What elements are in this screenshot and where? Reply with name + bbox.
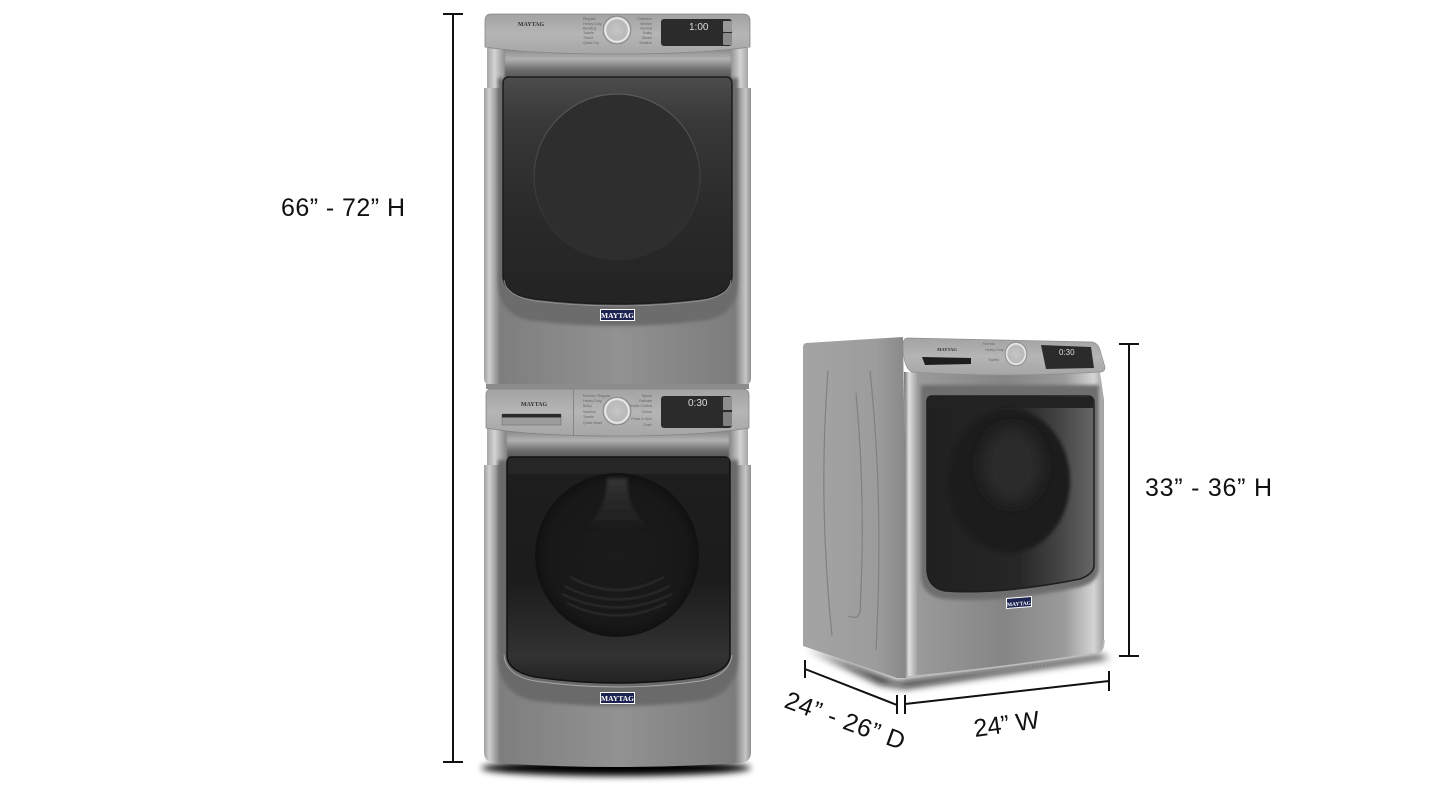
time readout: 0:30 [688, 398, 708, 409]
washer [484, 389, 751, 767]
dryer control panel [485, 14, 750, 54]
dimension: width [905, 671, 1109, 743]
drum outline [534, 94, 700, 260]
washer control panel [486, 389, 749, 436]
washer badge [1006, 596, 1032, 609]
cycle labels right: Delicate [639, 399, 652, 403]
washer recess band [507, 432, 729, 460]
bracket [443, 14, 463, 762]
cycle labels left: Towels [583, 415, 594, 419]
bracket [905, 671, 1109, 714]
door surround [921, 385, 1099, 600]
dryer recess band [505, 50, 731, 80]
door glass [927, 396, 1094, 592]
door top band [508, 458, 729, 474]
dimension: stacked height [281, 14, 463, 762]
seam between units [486, 384, 749, 389]
badge field [1007, 597, 1031, 608]
cycle labels right: Drain [643, 423, 652, 427]
label: 33” - 36” H [1145, 474, 1272, 502]
badge field [601, 310, 634, 320]
display [661, 19, 732, 46]
badge text: MAYTAG [1007, 601, 1032, 608]
label: 24” W [972, 706, 1042, 743]
floor shadow [481, 760, 751, 776]
panel divider [572, 389, 574, 436]
cycle labels left: Regular [583, 17, 596, 21]
badge text: MAYTAG [601, 311, 634, 320]
second button [723, 412, 732, 426]
cycle labels [983, 342, 1004, 362]
cycle labels left: Bulky [583, 404, 592, 408]
cycle labels left: Heavy Duty [583, 399, 602, 403]
label: 24” - 26” D [781, 686, 909, 756]
drum ribs [562, 577, 672, 616]
cycle labels: Towels [988, 358, 999, 362]
knob [1005, 342, 1027, 366]
badge plate [600, 309, 635, 321]
stacked dryer on washer [481, 14, 751, 776]
drum texture [982, 427, 1042, 503]
cycle labels right: Delicates [637, 17, 652, 21]
washer door [504, 457, 732, 687]
washer badge [600, 692, 635, 704]
drum [535, 473, 699, 637]
dryer [484, 14, 751, 385]
cycle labels: Heavy Duty [985, 348, 1004, 352]
cycle labels right: Sanitize [639, 41, 652, 45]
cycle labels left: Quick Wash [583, 421, 602, 425]
washer shadow [806, 648, 1110, 688]
badge plate [600, 692, 635, 704]
panel plate [903, 338, 1105, 375]
second button [723, 33, 732, 45]
bracket [1119, 344, 1139, 656]
badge plate [1006, 596, 1032, 609]
cycle labels right: Steam [642, 36, 652, 40]
display [1041, 345, 1094, 369]
badge field [601, 693, 634, 703]
baffle [586, 478, 648, 528]
door glass [503, 77, 732, 304]
washer door surround [498, 460, 738, 706]
display [661, 396, 732, 428]
washer body [484, 465, 751, 767]
badge text: MAYTAG [601, 694, 634, 703]
cycle labels right: Wrinkle Control [628, 404, 652, 408]
cycle labels left: Towels [583, 31, 594, 35]
display panel [661, 396, 732, 428]
cycle labels right: Rinse & Spin [631, 417, 652, 421]
door highlight [504, 280, 731, 306]
display button [723, 21, 732, 32]
label: 66” - 72” H [281, 194, 405, 222]
cycle labels right: Bulky [643, 31, 652, 35]
cycle labels left: Timed [583, 36, 593, 40]
dryer badge [600, 309, 635, 321]
cycle labels left: Normal / Regular [583, 394, 611, 398]
cycle labels left [583, 17, 602, 45]
cycle labels: Normal [983, 342, 995, 346]
dryer door [503, 77, 732, 306]
door top band [929, 397, 1093, 408]
detergent drawer [922, 357, 971, 365]
panel plate [485, 14, 750, 54]
dryer body [484, 88, 751, 385]
detergent drawer [502, 414, 561, 425]
dimension: depth [781, 660, 909, 756]
dryer collar [487, 48, 748, 88]
cycle labels right: Normal [640, 26, 652, 30]
dryer door surround [498, 78, 738, 326]
drawer shadow [502, 414, 561, 418]
cycle labels right [628, 394, 652, 427]
time readout: 0:30 [1059, 348, 1075, 357]
single washer perspective view [803, 337, 1110, 688]
door highlight [504, 655, 732, 687]
brand: MAYTAG [518, 22, 544, 28]
cycle labels left [583, 394, 611, 425]
door glass [507, 457, 730, 683]
dimension: washer height [1119, 344, 1272, 656]
washer door [921, 385, 1099, 600]
display panel [1041, 345, 1094, 369]
cycle labels right: Colors [642, 410, 652, 414]
cycle labels right: Wrinkle [640, 22, 652, 26]
time readout: 1:00 [689, 22, 709, 33]
drum [948, 409, 1070, 553]
display panel [661, 19, 732, 46]
side panel embossing [824, 371, 879, 650]
knob [603, 16, 631, 44]
cycle labels left: Bedding [583, 26, 596, 30]
front bottom lip [906, 640, 1104, 677]
washer front [904, 372, 1104, 678]
knob [603, 397, 631, 425]
brand: MAYTAG [521, 402, 547, 408]
washer collar [487, 425, 748, 465]
panel plate [486, 389, 749, 436]
cycle labels right: Sports [642, 394, 652, 398]
cycle labels right [637, 17, 652, 45]
cycle labels left: Heavy Duty [583, 22, 602, 26]
display button [723, 397, 732, 410]
brand: MAYTAG [937, 347, 957, 352]
washer control panel [903, 338, 1105, 375]
cycle labels left: Quick Dry [583, 41, 599, 45]
washer side panel [803, 337, 908, 678]
bracket [805, 660, 897, 714]
cycle labels left: Sanitize [583, 410, 596, 414]
